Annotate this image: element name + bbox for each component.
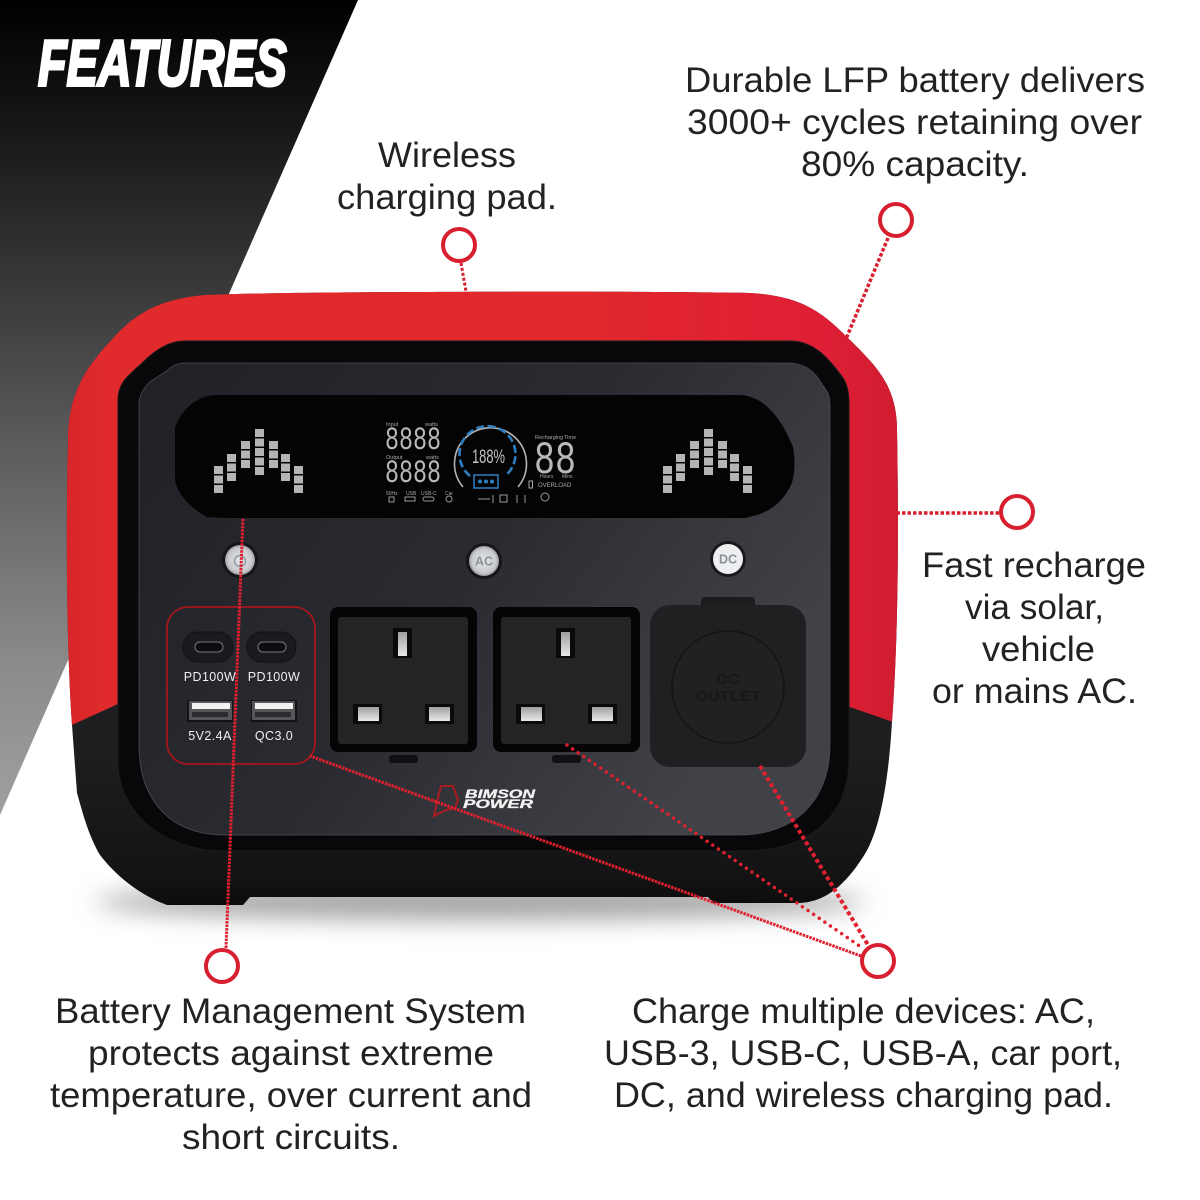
input and output readouts: watts <box>424 422 438 428</box>
right level bars <box>663 429 752 493</box>
input and output readouts: Output <box>386 455 403 461</box>
front frame <box>118 341 849 851</box>
LCD display <box>175 395 794 518</box>
callout: wireless charging pad <box>337 136 557 297</box>
title: FEATURES <box>38 28 287 100</box>
status icons: USB-C <box>421 491 437 497</box>
recharging time readout: 88 <box>534 435 576 487</box>
USB-A ports <box>187 700 297 722</box>
recharging time readout: OVERLOAD <box>538 483 572 489</box>
recharging time readout: Hours <box>540 474 554 480</box>
AC socket right <box>493 607 640 763</box>
recharging time readout: Mins <box>562 474 573 480</box>
input and output readouts: 8888 <box>385 455 441 492</box>
DC outlet cover: OUTLET <box>695 688 761 705</box>
battery gauge <box>454 426 526 488</box>
brand logo: POWER <box>463 799 534 811</box>
port labels <box>184 670 300 743</box>
callout: fast recharge <box>895 496 1146 711</box>
callout: LFP battery: Durable LFP battery delivers <box>685 61 1145 100</box>
port labels: 5V2.4A <box>188 729 232 743</box>
input and output readouts: 8888 <box>385 422 441 459</box>
callout: battery management system: temperature, over current and <box>50 1076 532 1115</box>
recharging time readout <box>529 435 576 489</box>
callout: battery management system: Battery Management System <box>55 992 526 1031</box>
callout: charge multiple devices: USB-3, USB-C, USB-A, car port, <box>604 1034 1122 1073</box>
callout: charge multiple devices <box>310 745 1122 1115</box>
callout: battery management system: protects against extreme <box>88 1034 494 1073</box>
recharging time readout: Time <box>564 435 576 441</box>
USB port group <box>167 607 315 764</box>
status icons: Car <box>445 491 453 497</box>
battery gauge: 188% <box>472 447 505 468</box>
recharging time readout: Recharging <box>535 435 563 441</box>
buttons: AC <box>475 554 493 568</box>
input and output readouts <box>385 422 441 492</box>
callout: wireless charging pad: Wireless <box>378 136 516 175</box>
front panel <box>139 363 830 835</box>
AC socket left <box>330 607 477 763</box>
callout: wireless charging pad: charging pad. <box>337 178 557 217</box>
status icons: 50Hz <box>386 491 398 497</box>
callout: fast recharge: or mains AC. <box>932 672 1137 711</box>
status icons <box>386 491 549 503</box>
port labels: PD100W <box>248 670 300 684</box>
DC outlet cover <box>650 597 806 767</box>
brand logo <box>434 786 536 816</box>
callout: charge multiple devices: Charge multiple devices: AC, <box>632 992 1095 1031</box>
DC outlet cover: DC <box>716 671 740 688</box>
callout: charge multiple devices: DC, and wireless charging pad. <box>614 1076 1113 1115</box>
USB-C ports <box>183 632 296 662</box>
power station <box>60 285 905 910</box>
input and output readouts: watts <box>425 455 439 461</box>
callout: battery management system <box>50 518 532 1157</box>
brand logo: BIMSON <box>465 789 536 801</box>
callout: fast recharge: via solar, <box>965 588 1104 627</box>
callout: LFP battery <box>685 61 1145 339</box>
callout: LFP battery: 3000+ cycles retaining over <box>687 103 1142 142</box>
status icons: USB <box>406 491 417 497</box>
left level bars <box>214 429 303 493</box>
background black diagonal panel <box>0 0 358 815</box>
port labels: QC3.0 <box>255 729 293 743</box>
callout: battery management system: short circuits. <box>182 1118 400 1157</box>
buttons <box>222 541 746 579</box>
callout: fast recharge: vehicle <box>982 630 1095 669</box>
callout: LFP battery: 80% capacity. <box>801 145 1029 184</box>
buttons: DC <box>719 552 737 566</box>
port labels: PD100W <box>184 670 236 684</box>
body shell <box>60 285 905 910</box>
input and output readouts: Input <box>386 422 399 428</box>
floor shadow <box>95 884 865 920</box>
callout: fast recharge: Fast recharge <box>922 546 1146 585</box>
